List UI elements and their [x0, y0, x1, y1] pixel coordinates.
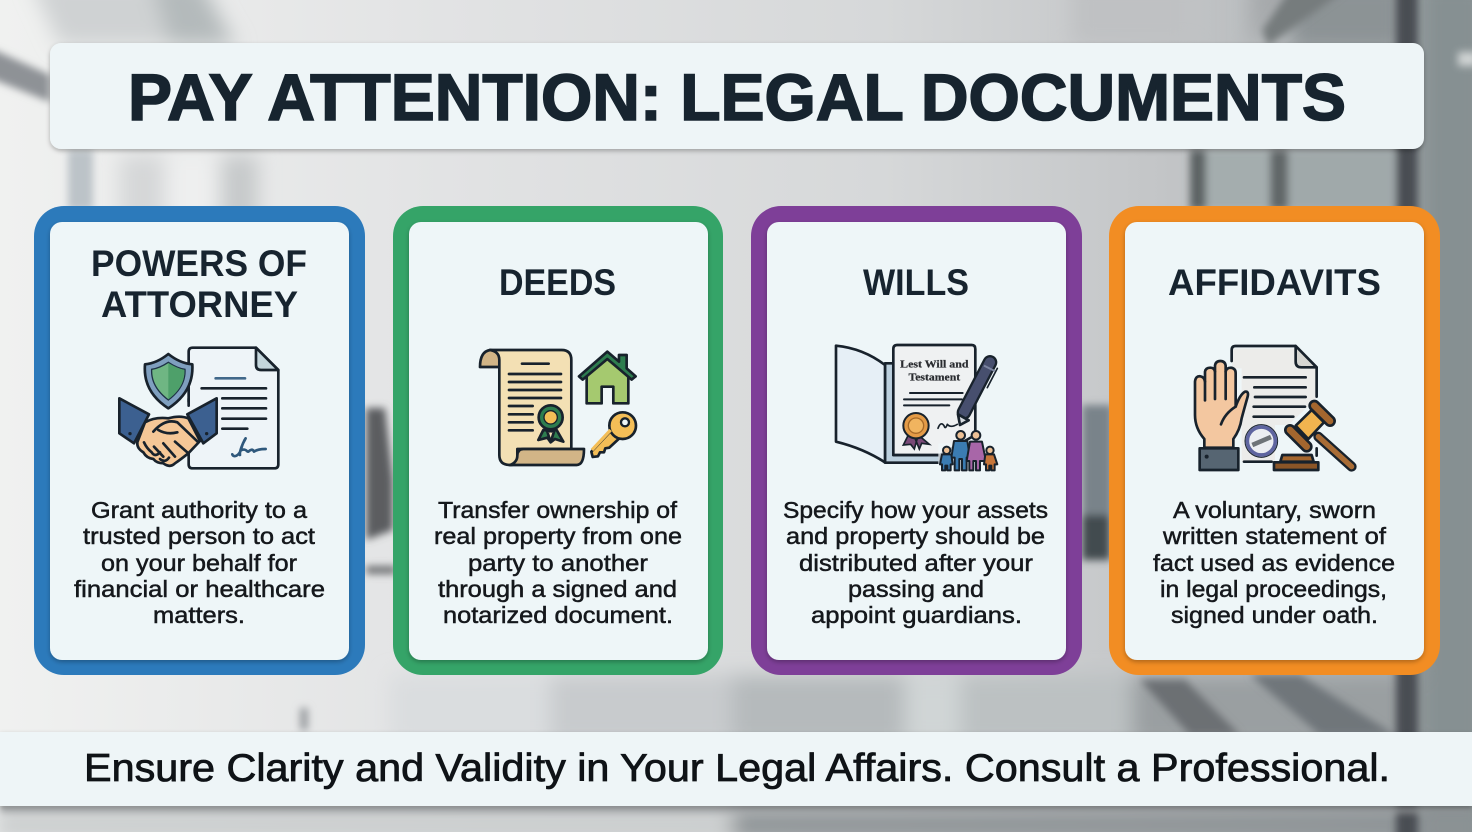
text: powers of attorney description — [74, 497, 325, 628]
text: wills description: and property should be — [786, 523, 1045, 549]
panel: deeds — [393, 206, 723, 675]
heading: powers of attorney: ATTORNEY — [101, 284, 298, 325]
text: wills description — [783, 497, 1048, 628]
text: deeds description: party to another — [468, 550, 648, 576]
text: deeds description: notarized document. — [443, 602, 673, 628]
panel: wills — [751, 206, 1082, 675]
title banner — [50, 43, 1424, 149]
text: affidavits description: fact used as evidence — [1153, 550, 1395, 576]
icon: handshake, shield and signed document — [119, 348, 278, 468]
panel: powers of attorney — [34, 206, 365, 675]
text: wills description: distributed after your — [799, 550, 1033, 576]
text: affidavits description: signed under oath. — [1171, 602, 1378, 628]
text: wills description: Specify how your assets — [783, 497, 1048, 523]
text: wills description: passing and — [848, 576, 984, 602]
heading: affidavits: AFFIDAVITS — [1168, 262, 1381, 303]
text: powers of attorney description: matters. — [153, 602, 245, 628]
title: PAY ATTENTION: LEGAL DOCUMENTS — [128, 60, 1346, 134]
heading: powers of attorney — [91, 243, 307, 325]
heading: wills: WILLS — [863, 262, 969, 303]
text: affidavits description — [1153, 497, 1395, 628]
icon: last will, pen and family: Testament — [908, 373, 961, 384]
text: deeds description: through a signed and — [438, 576, 677, 602]
text: wills description: appoint guardians. — [811, 602, 1022, 628]
text: affidavits description: written statement of — [1162, 523, 1386, 549]
heading: deeds: DEEDS — [499, 262, 616, 303]
text: powers of attorney description: Grant authority to a — [91, 497, 308, 523]
icon: last will, pen and family — [836, 345, 1000, 473]
icon: raised hand, sworn document and gavel — [1195, 346, 1352, 470]
footer banner — [0, 732, 1472, 806]
text: powers of attorney description: trusted person to act — [83, 523, 316, 549]
text: powers of attorney description: financial or healthcare — [74, 576, 325, 602]
footer message: Ensure Clarity and Validity in Your Legal Affairs. Consult a Professional. — [84, 747, 1390, 790]
icon: last will, pen and family: Lest Will and — [900, 359, 969, 370]
panel: affidavits — [1109, 206, 1440, 675]
text: deeds description: real property from one — [434, 523, 682, 549]
text: deeds description: Transfer ownership of — [438, 497, 677, 523]
text: powers of attorney description: on your behalf for — [101, 550, 297, 576]
text: affidavits description: A voluntary, sworn — [1173, 497, 1376, 523]
icon: scroll deed, house and key — [480, 350, 636, 465]
text: deeds description — [434, 497, 682, 628]
heading: powers of attorney: POWERS OF — [91, 243, 307, 284]
text: affidavits description: in legal proceedings, — [1160, 576, 1387, 602]
